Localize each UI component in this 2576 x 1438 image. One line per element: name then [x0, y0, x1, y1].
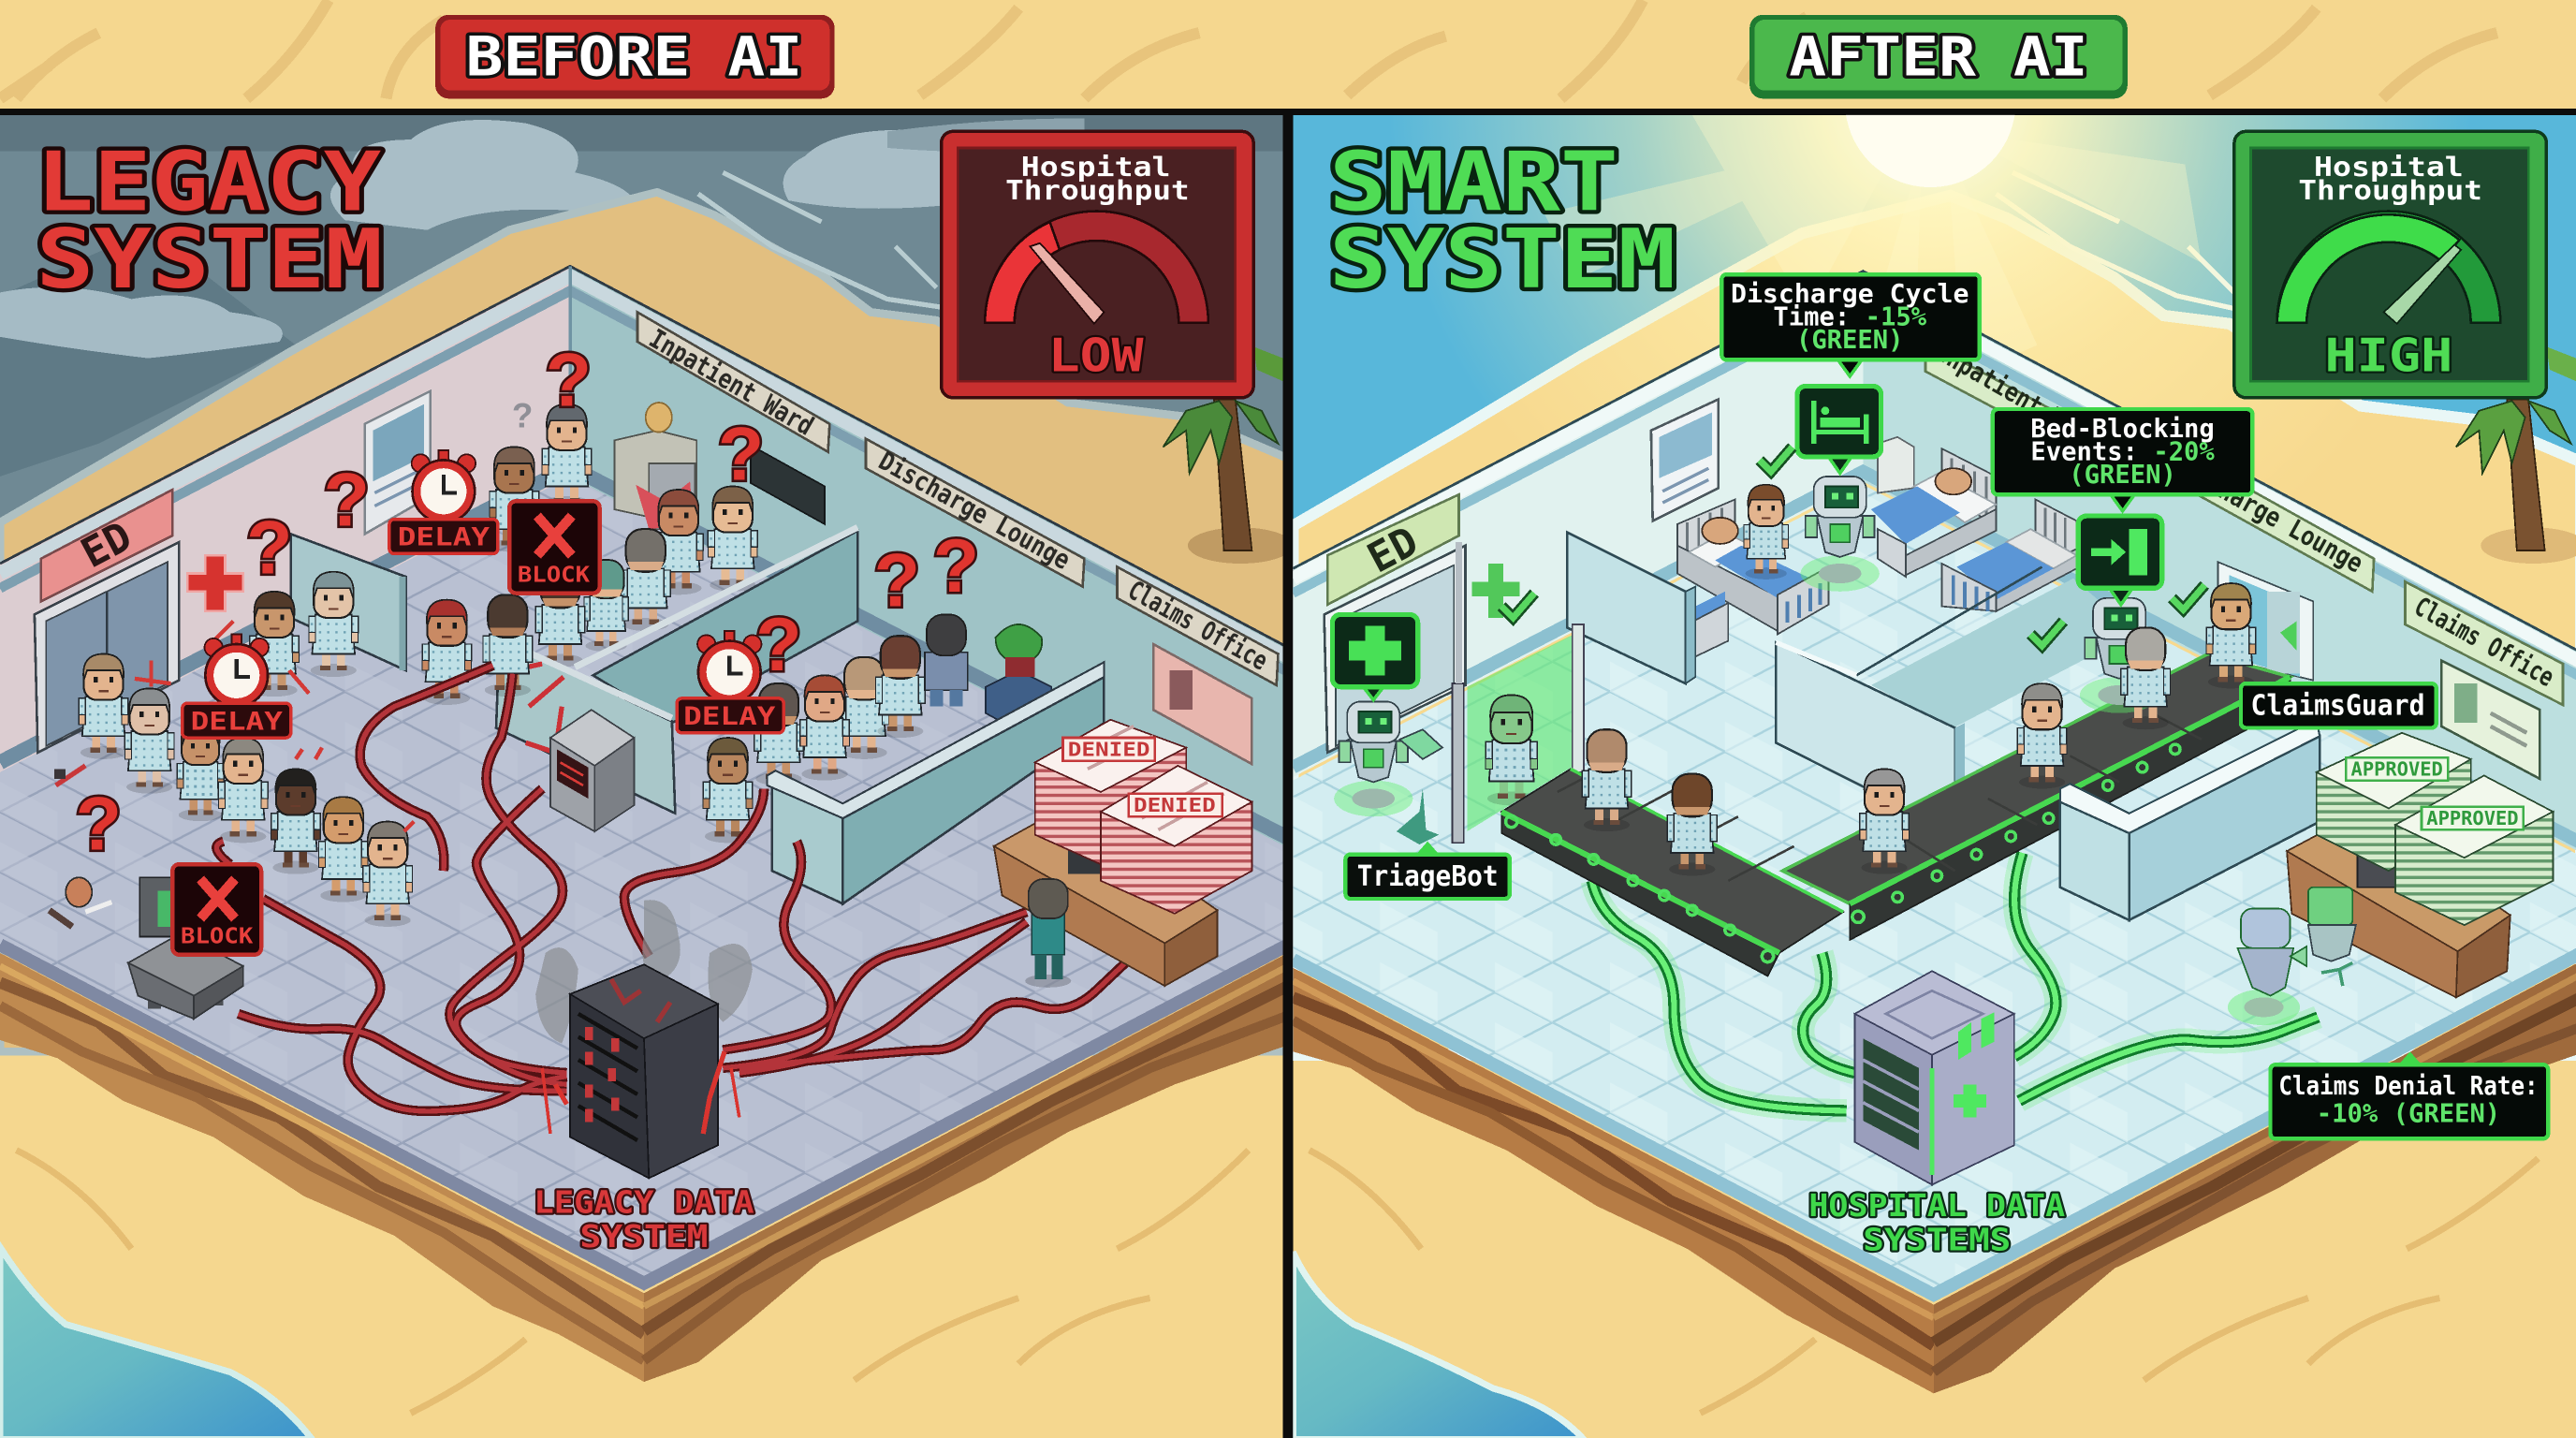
- label: TriageBot: [1345, 842, 1510, 899]
- ED sign: [1327, 494, 1459, 605]
- bed-blocking callout: Events: -20%: [2030, 437, 2215, 466]
- gauge panel: low throughput: Throughput: [1005, 175, 1190, 206]
- red sparks: [135, 621, 414, 831]
- confusion marks: ?: [546, 339, 592, 423]
- confusion marks: [76, 339, 979, 866]
- title: legacy system: SYSTEM: [37, 212, 383, 307]
- gauge panel: high throughput: [2234, 131, 2546, 398]
- checkmarks: [1760, 447, 2204, 646]
- icon: exit door: [2078, 516, 2162, 605]
- triage robot: [1334, 701, 1442, 844]
- ED door: [35, 542, 179, 753]
- panel: smart system: [1293, 17, 2576, 1438]
- confusion marks: ?: [324, 459, 370, 543]
- front sea: [0, 1247, 312, 1438]
- right wall: [570, 266, 1288, 848]
- confusion marks: ?: [874, 539, 920, 624]
- brown cliff right: [1934, 961, 2576, 1393]
- discharge callout: [1721, 274, 1980, 376]
- tiled floor: [1293, 485, 2576, 1301]
- green medical cross and check: [1472, 564, 1534, 618]
- conveyor patients: [1582, 683, 2067, 875]
- legacy server rack: [542, 964, 739, 1178]
- claims denial callout: Claims Denial Rate:: [2278, 1072, 2539, 1101]
- block alert: ward: BLOCK: [518, 563, 590, 587]
- denied paper stacks: [1035, 720, 1251, 914]
- wall sign: inpatient ward: Inpatient Ward: [644, 323, 819, 442]
- ED sign: ED: [1360, 518, 1426, 582]
- confusion marks: ?: [512, 396, 533, 434]
- tangled red cables: [216, 666, 1125, 1111]
- delay alert: ward: [389, 450, 498, 553]
- digital data pipes: [1592, 853, 2318, 1110]
- confusion marks: ?: [718, 412, 764, 496]
- ward patients behind partition: [490, 404, 757, 668]
- brown cliff right: [644, 953, 1288, 1382]
- kiosk machine: [550, 710, 634, 831]
- fallen clutter: [50, 766, 111, 927]
- discharge robot: [1801, 477, 1880, 592]
- title: smart system: [1329, 135, 1676, 307]
- title: legacy system: LEGACY: [37, 135, 381, 230]
- delay alert: ward: DELAY: [398, 524, 490, 552]
- partition: corridor wall: [496, 639, 675, 814]
- label: legacy data system: SYSTEM: [580, 1218, 708, 1255]
- patients queue: [79, 572, 925, 927]
- red medical cross: [187, 555, 243, 611]
- smoke: [535, 900, 753, 1043]
- sand streaks: [17, 1151, 1249, 1413]
- block alert: ward: [509, 501, 600, 594]
- hospital bed: resting patient: [1871, 448, 1996, 577]
- surf lines: [698, 172, 953, 309]
- approved paper stacks: [2317, 733, 2553, 925]
- delay alert: ED: [183, 634, 291, 738]
- partition: ward wall: [575, 527, 857, 723]
- partition: ward wall: [1856, 567, 2136, 728]
- wall sign: discharge lounge: Discharge Lounge: [2167, 448, 2368, 579]
- block alert: workstation: [172, 864, 261, 955]
- reception desk: [994, 805, 1218, 986]
- palm tree: [1164, 346, 1293, 564]
- beach sand behind hospital: [0, 192, 1288, 1051]
- label: hospital data systems: HOSPITAL DATA: [1808, 1187, 2065, 1224]
- gauge panel: low throughput: LOW: [1048, 329, 1144, 383]
- wall rim: [1293, 271, 2576, 843]
- top divider bar: [0, 109, 2576, 117]
- claims robots: [2228, 888, 2356, 1025]
- right wall: [1863, 271, 2576, 853]
- label: ClaimsGuard: [2241, 683, 2437, 728]
- wall poster: [365, 391, 431, 534]
- discharge callout: Time: -15%: [1773, 303, 1927, 332]
- sun glow and rays: [1293, 17, 2576, 772]
- bed-blocking callout: Bed-Blocking: [2030, 415, 2215, 444]
- tiled floor: [0, 477, 1288, 1290]
- brown cliff left: [1293, 968, 1934, 1393]
- palm tree: [2456, 346, 2576, 564]
- label: hospital data systems: [1808, 1187, 2065, 1258]
- wall rim: [0, 266, 1288, 838]
- discharge callout: Discharge Cycle: [1731, 280, 1969, 309]
- bright sea: [1293, 115, 2576, 657]
- left wall: [0, 266, 570, 772]
- partition: corridor wall: [1776, 642, 1965, 833]
- confusion marks: ?: [755, 603, 802, 687]
- gauge panel: low throughput: [942, 131, 1253, 398]
- center divider: [1283, 109, 1293, 1438]
- heading badge: before AI: [435, 15, 835, 98]
- stormy sea and sky: [0, 115, 1282, 518]
- computer workstation: [128, 877, 243, 1019]
- label: ClaimsGuard: ClaimsGuard: [2250, 689, 2425, 722]
- claims denial callout: -10% (GREEN): [2317, 1100, 2500, 1129]
- approved office poster: [2441, 661, 2539, 779]
- bedside cabinet: [1878, 437, 1914, 493]
- heading badge: after AI: [1749, 15, 2128, 98]
- label: legacy data system: LEGACY DATA: [534, 1183, 754, 1220]
- denied paper stacks: DENIED: [1068, 738, 1150, 760]
- title: smart system: SYSTEM: [1329, 212, 1676, 307]
- partition: ED bay: [1567, 533, 1695, 683]
- hospital bed: patient sitting: [1677, 500, 1828, 634]
- claims denial callout: [2271, 1051, 2548, 1138]
- ED door: [1325, 546, 1466, 753]
- heading badge: before AI: BEFORE AI: [466, 25, 802, 89]
- wall sign: claims office: [1117, 567, 1278, 685]
- hospital data server: [1855, 971, 2014, 1184]
- smart conveyor belt: [1501, 654, 2291, 976]
- floor edge: [1293, 953, 2576, 1295]
- wall sign: inpatient ward: Inpatient Ward: [1930, 336, 2105, 455]
- hospital bed: behind partition: [1686, 592, 1728, 661]
- confusion marks: ?: [246, 506, 292, 591]
- conveyor patients near lounge: [2121, 583, 2256, 729]
- title: smart system: SMART: [1329, 135, 1618, 230]
- wall sign: discharge lounge: Discharge Lounge: [873, 445, 1076, 576]
- reception desk: [2287, 812, 2510, 997]
- discharge callout: (GREEN): [1796, 326, 1904, 355]
- gauge panel: low throughput: Hospital: [1021, 152, 1171, 183]
- confusion marks: ?: [76, 782, 122, 866]
- wall poster: [1651, 399, 1719, 521]
- storage cabinet and duck: [614, 403, 696, 529]
- icon: bed: [1797, 386, 1881, 473]
- block alert: workstation: BLOCK: [181, 924, 254, 948]
- floor edge: [0, 945, 1288, 1284]
- panel: legacy system: [0, 115, 1293, 1438]
- patient sitting on bed: [1744, 485, 1788, 580]
- approved paper stacks: APPROVED: [2426, 807, 2519, 829]
- surf lines: [1996, 172, 2250, 312]
- ED sign: [41, 490, 172, 601]
- heading badge: after AI: AFTER AI: [1789, 25, 2088, 89]
- approved paper stacks: APPROVED: [2351, 757, 2443, 780]
- beach sand: [1293, 196, 2576, 1055]
- green holographic gate: [1453, 542, 1584, 843]
- left wall: [1293, 271, 1863, 777]
- blocked office poster: [1153, 644, 1251, 764]
- label: TriageBot: TriageBot: [1357, 860, 1499, 893]
- partition: claims counter: [2060, 720, 2320, 920]
- wall notice board: [751, 446, 825, 524]
- gauge panel: high throughput: Hospital: [2314, 152, 2464, 183]
- wall sign: claims office: Claims Office: [1123, 575, 1273, 676]
- brown cliff left: [0, 953, 644, 1382]
- label: legacy data system: [535, 1187, 756, 1250]
- label: hospital data systems: SYSTEMS: [1863, 1222, 2011, 1258]
- clerk figure: [1025, 879, 1071, 988]
- staff member in blue scrubs: [925, 614, 968, 707]
- ED sign: ED: [74, 512, 139, 578]
- confusion marks: ?: [933, 524, 979, 609]
- plant and cabinet: [986, 624, 1051, 731]
- delay alert: discharge: [677, 631, 783, 733]
- icon: triage cross: [1332, 614, 1418, 700]
- lounge exit door: [2217, 562, 2313, 681]
- bed-blocking callout: (GREEN): [2069, 461, 2176, 490]
- delay alert: discharge: DELAY: [683, 703, 776, 731]
- hospital bed: empty: [1942, 500, 2076, 611]
- sand streaks: [1310, 1151, 2539, 1413]
- denied paper stacks: DENIED: [1134, 794, 1216, 816]
- partition: ED bay: [291, 534, 406, 670]
- gauge panel: high throughput: HIGH: [2324, 329, 2452, 383]
- lounge robot: [2080, 598, 2159, 713]
- title: legacy system: [37, 135, 383, 307]
- delay alert: ED: DELAY: [191, 708, 283, 736]
- front sea: [1293, 1252, 1584, 1438]
- partition: claims counter: [768, 662, 1104, 903]
- gauge panel: high throughput: Throughput: [2298, 175, 2482, 206]
- bed-blocking callout: [1993, 409, 2252, 511]
